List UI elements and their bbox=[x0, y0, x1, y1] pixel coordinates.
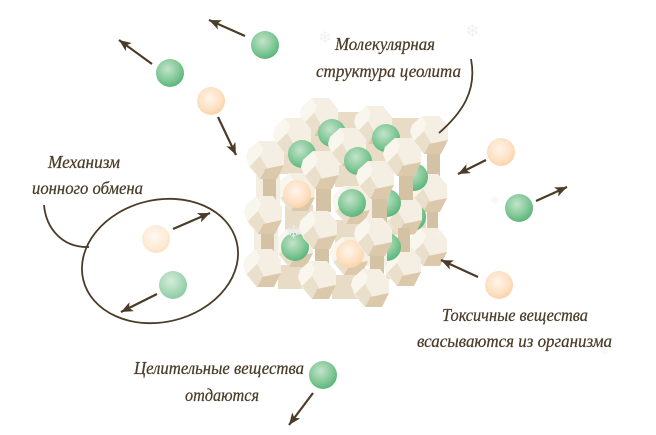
callout: ion exchange mechanism bbox=[44, 183, 251, 339]
lattice snowflakes: ❄ bbox=[433, 228, 444, 243]
label: mechanism: Механизм bbox=[47, 152, 120, 172]
front pillars bbox=[254, 175, 387, 276]
label: toxic substances bbox=[417, 305, 612, 351]
snowflakes: ❄ bbox=[465, 21, 480, 42]
label: molecular structure bbox=[316, 34, 461, 81]
lattice snowflakes bbox=[286, 222, 444, 243]
label: toxic substances: всасываются из организма bbox=[417, 331, 612, 351]
snowflakes bbox=[318, 21, 609, 358]
label: molecular structure: структура цеолита bbox=[316, 61, 461, 81]
back nodes bbox=[300, 98, 448, 266]
label: molecular structure: Молекулярная bbox=[334, 34, 435, 54]
cup nodes behind front balls bbox=[275, 173, 387, 275]
front balls bbox=[281, 180, 366, 268]
snowflakes: ❄ bbox=[600, 345, 609, 358]
snowflakes: ❄ bbox=[318, 28, 332, 48]
label: toxic substances: Токсичные вещества bbox=[442, 305, 588, 325]
arrows bbox=[119, 20, 567, 425]
middle nodes and pillars bbox=[273, 118, 422, 286]
zeolite lattice bbox=[243, 98, 448, 307]
label: healing substances: Целительные вещества bbox=[133, 358, 304, 378]
back balls bbox=[318, 119, 428, 231]
label: healing substances bbox=[133, 358, 304, 405]
label: healing substances: отдаются bbox=[185, 385, 259, 405]
middle balls bbox=[288, 140, 401, 261]
floating balls bbox=[156, 31, 533, 389]
label: mechanism: ионного обмена bbox=[32, 178, 143, 198]
lattice snowflakes: ❄ bbox=[286, 222, 301, 243]
label: mechanism bbox=[32, 152, 143, 198]
connectors bbox=[278, 112, 426, 299]
leader line: zeolite label bbox=[439, 59, 472, 133]
front nodes bbox=[243, 141, 394, 307]
snowflakes: ❄ bbox=[490, 194, 499, 207]
back pillars bbox=[427, 150, 440, 233]
